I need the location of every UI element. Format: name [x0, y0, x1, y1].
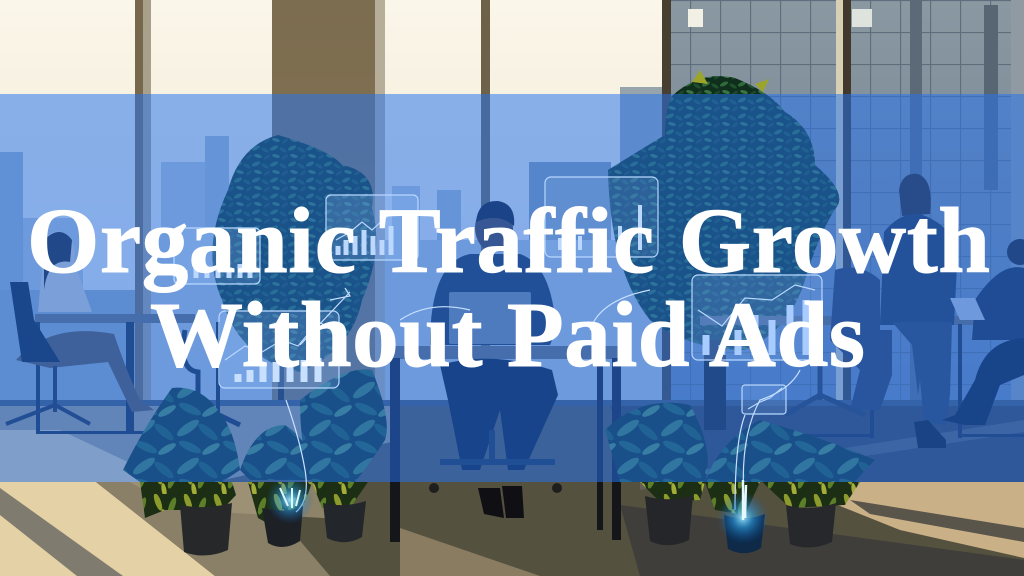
- person: central man: [429, 201, 562, 518]
- dashboard panel 1: [326, 195, 418, 260]
- pot five: glowing: [724, 514, 765, 553]
- plant glow right: [717, 480, 769, 544]
- dashboard panel 3: [219, 311, 339, 388]
- seated person behind desk: [830, 268, 892, 410]
- plant glow left: [266, 476, 314, 524]
- office chair: [785, 350, 865, 415]
- title: [27, 190, 990, 387]
- left desk: [35, 314, 220, 434]
- pot one: [180, 503, 232, 556]
- window sky: [0, 0, 1024, 410]
- central desk: [390, 346, 621, 542]
- potted plants right: [605, 403, 875, 553]
- ficus tree left: [212, 135, 376, 400]
- title line 1: Organic Traffic Growth: [27, 190, 990, 293]
- holographic data overlays: [174, 177, 822, 512]
- right desk: [700, 316, 1024, 438]
- potted plants left: [123, 369, 387, 556]
- left rear chair: [160, 330, 240, 425]
- window frames: [135, 0, 851, 402]
- plant foliage right: [605, 403, 708, 482]
- pot four: [645, 495, 693, 545]
- person: seated woman: [6, 231, 154, 424]
- dashboard panel 5: [692, 275, 822, 360]
- distant skyline: [0, 87, 662, 402]
- plant foliage left: [123, 388, 240, 482]
- translucent blue band: [0, 94, 1024, 482]
- wall column: [272, 0, 375, 410]
- pot six: [786, 503, 836, 548]
- dashboard panel 4: [545, 177, 658, 257]
- near glass buildings: [671, 0, 1024, 402]
- small chart panel: [742, 385, 786, 414]
- dashboard panel 2: [174, 228, 260, 284]
- person: standing woman: [880, 174, 958, 448]
- growth arrows and light streams: [286, 288, 800, 512]
- pot three: [323, 501, 366, 542]
- person: right seated man: [942, 239, 1024, 425]
- floor: [0, 406, 1024, 576]
- window sill: [0, 400, 1024, 407]
- ficus tree right: [608, 70, 839, 430]
- title line 2: Without Paid Ads: [150, 284, 865, 387]
- pot two: [262, 506, 303, 547]
